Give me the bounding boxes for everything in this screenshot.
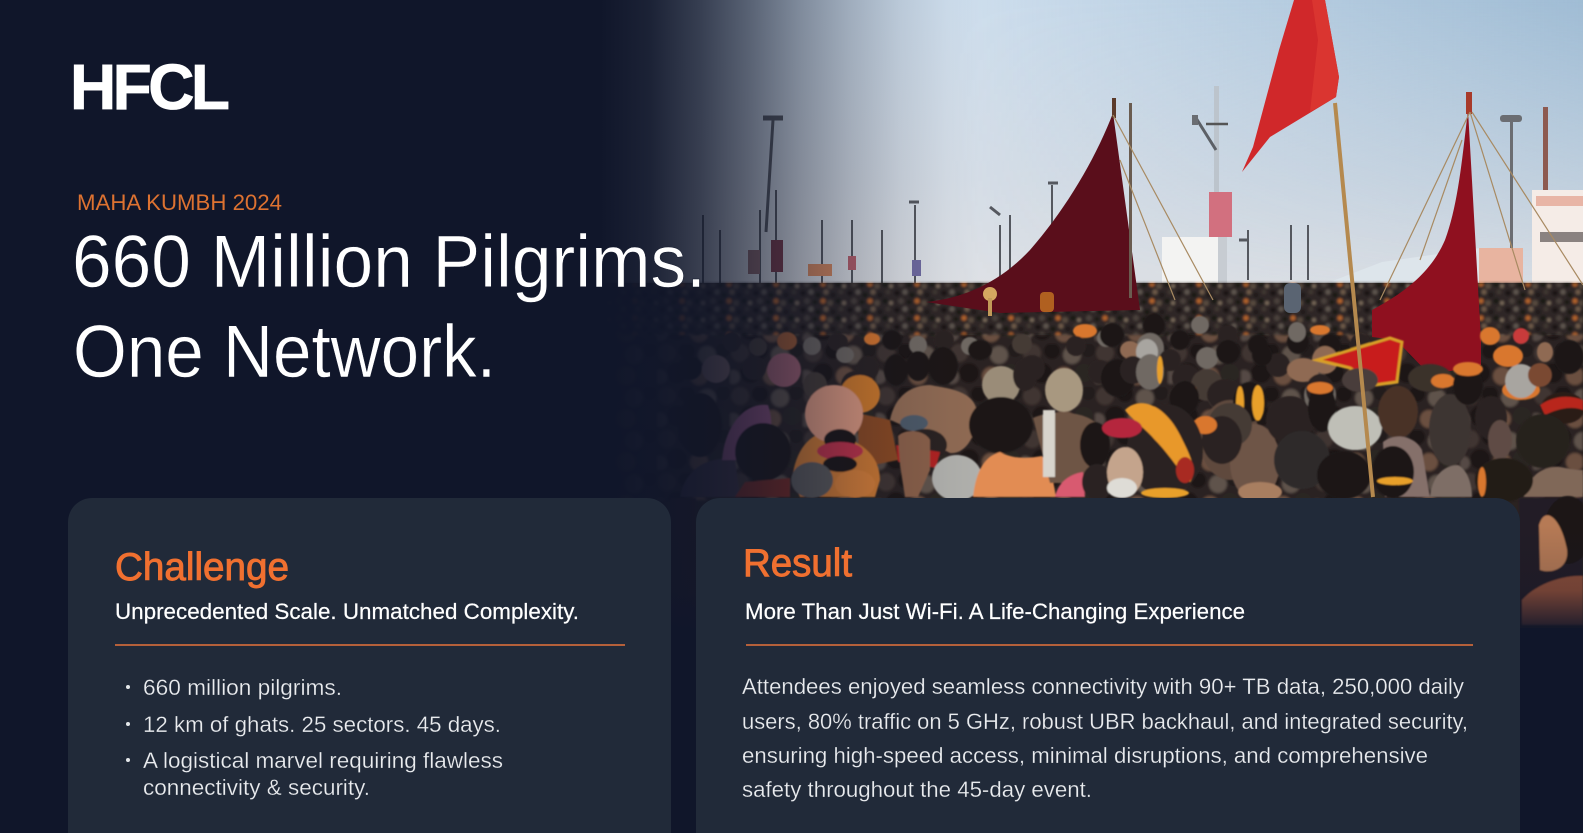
white roadside banner xyxy=(1532,190,1583,298)
orange turban xyxy=(840,375,880,413)
red waving flag xyxy=(1242,0,1339,172)
flower-crowned sadhu xyxy=(1102,403,1203,498)
main headline xyxy=(72,220,706,393)
dark heads behind crown xyxy=(1101,354,1223,413)
eyebrow: event name: MAHA KUMBH 2024 xyxy=(77,190,282,215)
result paragraph: ensuring high-speed access, minimal disruptions, and comprehensive xyxy=(742,743,1428,768)
pink turban xyxy=(805,385,863,443)
challenge bullet list xyxy=(126,675,503,800)
challenge subheading: Unprecedented Scale. Unmatched Complexity. xyxy=(115,599,579,624)
panel: challenge xyxy=(68,498,671,833)
garland heads xyxy=(1171,379,1280,500)
result paragraph xyxy=(742,674,1468,802)
main headline: 660 Million Pilgrims. xyxy=(72,220,706,303)
sky xyxy=(600,0,1583,300)
white tent xyxy=(1309,248,1500,300)
right lamp post and pole xyxy=(1500,107,1548,250)
left dark fade over photo xyxy=(560,0,980,700)
result paragraph: safety throughout the 45-day event. xyxy=(742,777,1092,802)
result paragraph: Attendees enjoyed seamless connectivity with 90+ TB data, 250,000 daily xyxy=(742,674,1465,699)
blond haired pilgrim xyxy=(982,366,1020,404)
crowd base xyxy=(600,283,1583,628)
panel: result xyxy=(696,498,1520,833)
challenge bullet list: 660 million pilgrims. xyxy=(143,675,342,700)
white board xyxy=(1162,237,1218,307)
logo: HFCL: HFCL xyxy=(70,51,230,123)
crowd heads xyxy=(678,313,1583,502)
dark heads near centre xyxy=(803,359,1037,399)
pink cloth figure xyxy=(1055,472,1085,497)
standing man xyxy=(1284,283,1301,313)
head with red band xyxy=(817,429,863,472)
far left heads under the fade xyxy=(678,353,801,497)
orange shoulders xyxy=(792,432,880,497)
dark head near the sadhu xyxy=(1080,422,1112,500)
result paragraph: users, 80% traffic on 5 GHz, robust UBR backhaul, and integrated security, xyxy=(742,709,1468,734)
result heading: Result xyxy=(743,542,852,585)
right hand crowd xyxy=(1238,340,1583,502)
bottom dark fade over photo xyxy=(560,525,1583,635)
center pole xyxy=(1192,86,1228,310)
reddish crowd in gap between cards xyxy=(671,498,696,623)
man with bare back in centre xyxy=(890,385,977,453)
gray head bottom left xyxy=(791,462,833,498)
small street banners xyxy=(748,240,921,276)
challenge heading: Challenge xyxy=(115,546,289,589)
pilgrim on right behind card xyxy=(1519,496,1583,625)
red and gold cloth held up xyxy=(1317,338,1402,385)
result subheading: More Than Just Wi-Fi. A Life-Changing Experience xyxy=(745,599,1245,624)
curly hair head xyxy=(969,397,1033,453)
dark head left xyxy=(735,423,791,481)
far crowd texture xyxy=(600,283,1583,353)
dark red triangular flag xyxy=(926,98,1213,313)
distant poles and lamps xyxy=(703,118,1308,285)
challenge bullet list: A logistical marvel requiring flawless xyxy=(143,748,503,773)
trident and mace xyxy=(983,287,1054,316)
purple scarf xyxy=(722,405,771,460)
pilgrim with white cloth xyxy=(1033,368,1098,483)
pink roadside banner xyxy=(1479,248,1523,295)
hero photo: crowd with flags xyxy=(600,0,1583,628)
blue cap and red band with raised fist xyxy=(896,415,947,497)
pink pole banner xyxy=(1209,192,1232,237)
main headline: One Network. xyxy=(73,310,496,393)
challenge bullet list: 12 km of ghats. 25 sectors. 45 days. xyxy=(143,712,501,737)
crimson flag on right mast xyxy=(1372,92,1583,375)
challenge bullet list: connectivity & security. xyxy=(143,775,370,800)
challenge card background xyxy=(68,498,671,833)
gray-white head xyxy=(932,455,982,501)
result card background xyxy=(696,498,1520,833)
orange shirt xyxy=(973,452,1056,497)
tall wooden flagpole xyxy=(1335,103,1373,497)
brown robe xyxy=(857,413,898,468)
mid crowd texture xyxy=(600,335,1583,500)
